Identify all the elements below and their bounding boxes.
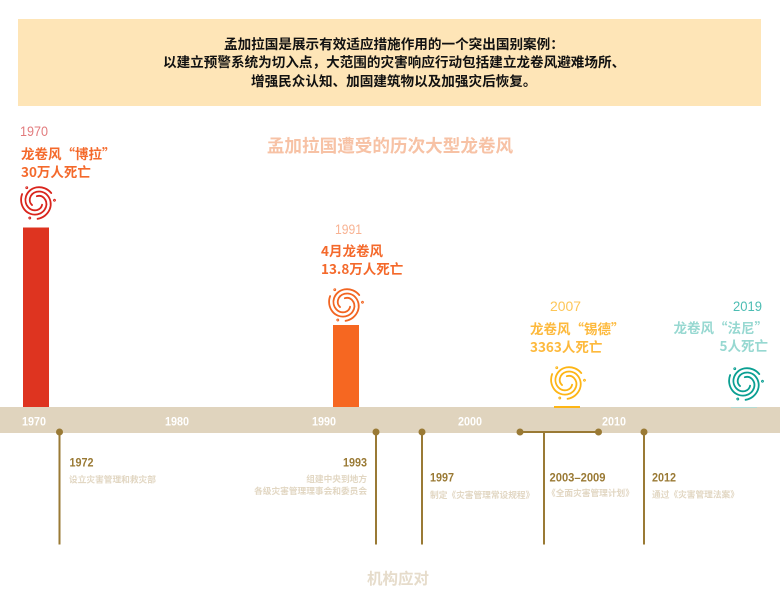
event 1993: 组建中央到地方 <box>306 472 367 485</box>
event 2012 <box>640 428 739 544</box>
axis labels: 1990 <box>312 414 336 428</box>
axis labels: 1980 <box>165 414 189 428</box>
section label: 机构应对 <box>367 567 429 589</box>
event 2012: 通过《灾害管理法案》 <box>652 488 739 500</box>
event 1972 <box>56 428 156 544</box>
icon: cyclone orange <box>317 278 370 332</box>
label 2019: 龙卷风“法尼” <box>674 317 768 337</box>
label 2007: 龙卷风“锡德” <box>530 318 624 338</box>
intro text: 以建立预警系统为切入点，大范围的灾害响应行动包括建立龙卷风避难场所、 <box>163 51 625 71</box>
icon: cyclone teal <box>717 357 770 411</box>
label 2007 <box>530 318 624 356</box>
event 1997: 1997 <box>430 470 454 484</box>
event 2012: 2012 <box>652 470 676 484</box>
bar 1970 <box>23 228 49 407</box>
event 1993 <box>254 428 380 544</box>
cyclone 1991: 1991 <box>335 221 362 237</box>
event 1993: 各级灾害管理理事会和委员会 <box>254 484 367 497</box>
label 1991: 4月龙卷风 <box>321 240 383 260</box>
axis labels <box>22 414 626 428</box>
cyclone 2007 <box>530 298 624 410</box>
label 2019: 5人死亡 <box>720 335 768 355</box>
label 1970 <box>21 143 116 181</box>
event 2003-2009 <box>516 428 634 544</box>
label 1970: 30万人死亡 <box>21 161 91 181</box>
intro banner <box>18 19 761 106</box>
cyclone 2019: 2019 <box>733 298 762 314</box>
label 1991 <box>321 240 403 278</box>
event 2003-2009: 2003–2009 <box>550 470 606 484</box>
axis labels: 2010 <box>602 414 626 428</box>
event 1997 <box>418 428 534 544</box>
cyclone 1970 <box>9 123 115 407</box>
title: 孟加拉国遭受的历次大型龙卷风 <box>267 133 514 158</box>
event 1993: 1993 <box>343 456 367 470</box>
cyclone 2007: 2007 <box>550 298 581 314</box>
intro text: 孟加拉国是展示有效适应措施作用的一个突出国别案例： <box>224 33 564 53</box>
axis labels: 2000 <box>458 414 482 428</box>
event 2003-2009: 《全面灾害管理计划》 <box>547 486 634 499</box>
event 1997: 制定《灾害管理常设规程》 <box>430 488 534 501</box>
label 2007: 3363人死亡 <box>530 336 602 356</box>
intro text <box>163 33 625 90</box>
cyclone 2019 <box>674 298 770 411</box>
bar 2019 <box>731 407 757 408</box>
intro text: 增强民众认知、加固建筑物以及加强灾后恢复。 <box>251 70 536 90</box>
label 2019 <box>674 317 768 355</box>
cyclone 1970: 1970 <box>20 123 48 139</box>
event 1972: 1972 <box>70 456 94 470</box>
icon: cyclone red <box>9 176 62 230</box>
icon: cyclone yellow <box>539 356 592 410</box>
cyclone 1991 <box>317 221 403 407</box>
event 1972: 设立灾害管理和救灾部 <box>69 472 156 486</box>
axis labels: 1970 <box>22 414 46 428</box>
label 1991: 13.8万人死亡 <box>321 258 403 278</box>
bar 2007 <box>554 406 580 408</box>
bar 1991 <box>333 325 359 407</box>
label 1970: 龙卷风“博拉” <box>21 143 116 163</box>
timeline band <box>0 407 780 433</box>
